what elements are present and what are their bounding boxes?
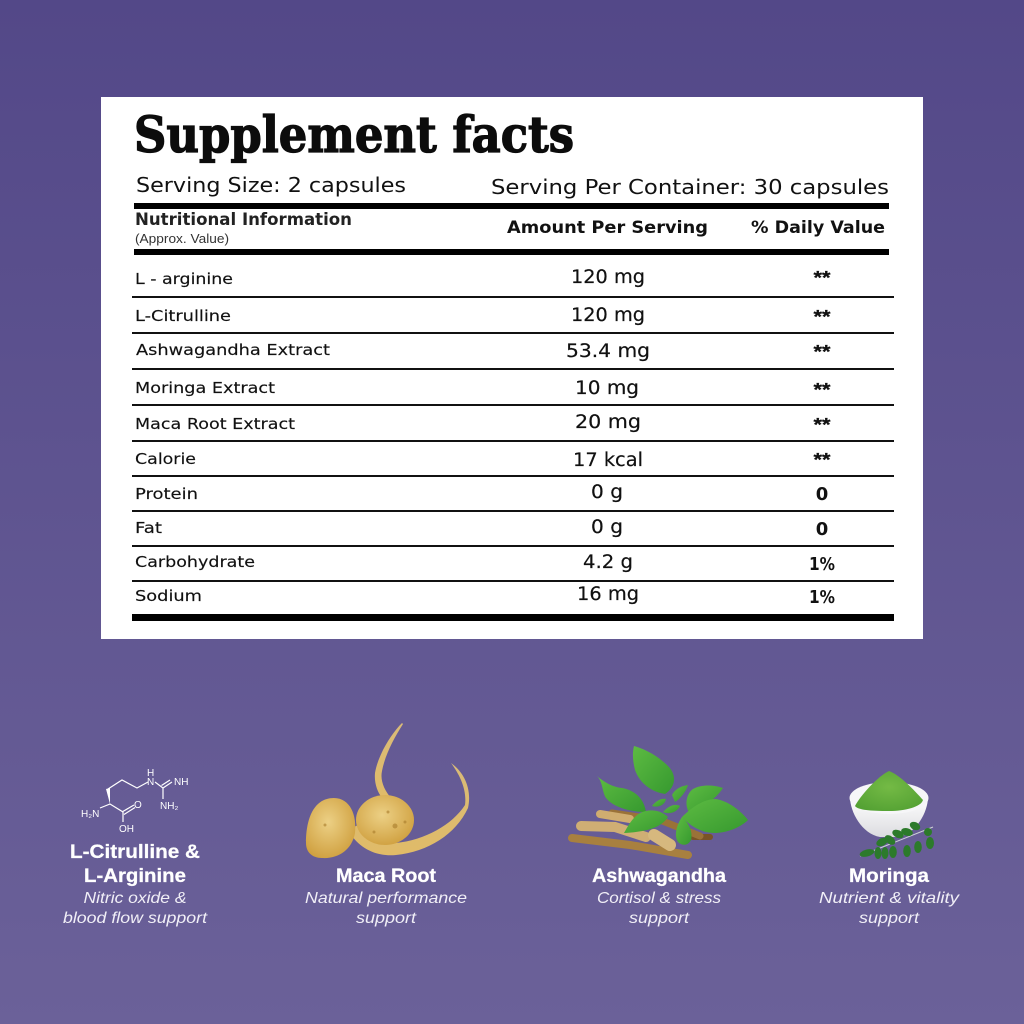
row: Sodium: Sodium: [135, 587, 202, 605]
icon: amino acid molecule: NH₂: [160, 801, 178, 812]
row: Protein: [135, 482, 828, 505]
serving size: Serving Size: 2 capsules: [136, 173, 406, 197]
row: Calorie: **: [814, 450, 830, 470]
row: L-Citrulline: [135, 305, 830, 327]
ingredient: Ashwagandha: support: [629, 910, 690, 927]
icon: amino acid molecule: OH: [119, 824, 134, 835]
description: Nutrient & vitality: [819, 890, 960, 907]
row: Fat: [135, 517, 828, 540]
ingredient: Ashwagandha: [572, 746, 748, 927]
row: Carbohydrate: Carbohydrate: [135, 553, 255, 571]
row: Sodium: 16 mg: [577, 584, 639, 605]
description: Nitric oxide &: [84, 890, 186, 907]
icon: moringa powder bowl and leaves: [850, 771, 934, 859]
column header: amount per serving: Amount Per Serving: [507, 218, 708, 238]
column header: nutritional information: (Approx. Value): [135, 232, 229, 246]
ingredient: L-Citrulline and L-Arginine: blood flow support: [63, 910, 208, 927]
row: Sodium: 1%: [809, 587, 835, 608]
ingredient: Moringa: support: [859, 910, 920, 927]
row: Ashwagandha Extract: 53.4 mg: [566, 341, 650, 362]
row: Maca Root Extract: Maca Root Extract: [135, 415, 295, 433]
row: Moringa Extract: [135, 378, 830, 400]
icon: ashwagandha plant and roots: [572, 746, 748, 855]
row: Moringa Extract: 10 mg: [575, 378, 639, 399]
row: L-arginine: 120 mg: [571, 267, 645, 288]
icon: maca root: [306, 723, 469, 858]
ingredient: Maca Root: [305, 723, 469, 927]
row: Protein: 0: [816, 484, 828, 505]
row: Maca Root Extract: 20 mg: [575, 412, 641, 433]
row: Fat: 0: [816, 519, 828, 540]
icon: amino acid molecule: N: [147, 777, 154, 788]
row: Carbohydrate: 4.2 g: [583, 552, 633, 573]
row: Sodium: [135, 584, 835, 608]
row: Moringa Extract: **: [814, 380, 830, 400]
column header: nutritional information: Nutritional Information: [135, 210, 352, 230]
icon: amino acid molecule: O: [134, 800, 142, 811]
title: Supplement facts: [134, 105, 574, 164]
icon: amino acid molecule: [81, 768, 188, 835]
row: L-arginine: [135, 267, 830, 288]
row rules: [132, 296, 894, 621]
row: Calorie: Calorie: [135, 450, 196, 468]
heading: L-Citrulline &: [70, 842, 200, 863]
row: L-arginine: L - arginine: [135, 270, 233, 288]
header rule top: [134, 203, 889, 209]
row: Protein: 0 g: [591, 482, 623, 503]
icon: amino acid molecule: H₂N: [81, 809, 99, 820]
ingredient: L-Citrulline and L-Arginine: [63, 768, 208, 927]
row: Protein: Protein: [135, 485, 198, 503]
description: Natural performance: [305, 890, 467, 907]
ingredient: Maca Root: support: [356, 910, 417, 927]
heading: Ashwagandha: [592, 866, 726, 887]
row: Moringa Extract: Moringa Extract: [135, 379, 275, 397]
row: Maca Root Extract: [135, 412, 830, 435]
ingredient: L-Citrulline and L-Arginine: L-Arginine: [84, 866, 186, 887]
column header: daily value: % Daily Value: [751, 218, 885, 238]
row: Carbohydrate: [135, 552, 835, 575]
row: Ashwagandha Extract: **: [814, 342, 830, 362]
row: L-Citrulline: **: [814, 307, 830, 327]
column header: nutritional information: [135, 210, 352, 246]
row: Carbohydrate: 1%: [809, 554, 835, 575]
heading: Maca Root: [336, 866, 437, 887]
row: L-Citrulline: L-Citrulline: [135, 307, 231, 325]
icon: amino acid molecule: H: [147, 768, 154, 779]
row: Ashwagandha Extract: Ashwagandha Extract: [136, 341, 330, 359]
header rule bottom: [134, 249, 889, 255]
heading: Moringa: [849, 866, 929, 887]
row: Calorie: [135, 450, 830, 471]
panel: supplement facts table: [101, 97, 923, 639]
ingredient: Moringa: [819, 771, 960, 927]
servings per container: Serving Per Container: 30 capsules: [491, 175, 889, 199]
icon: amino acid molecule: NH: [174, 777, 188, 788]
row: L-Citrulline: 120 mg: [571, 305, 645, 326]
row: Fat: 0 g: [591, 517, 623, 538]
row: Calorie: 17 kcal: [573, 450, 643, 471]
row: Maca Root Extract: **: [814, 415, 830, 435]
row: Ashwagandha Extract: [136, 341, 830, 362]
description: Cortisol & stress: [597, 890, 721, 907]
row: L-arginine: **: [814, 268, 830, 288]
row: Fat: Fat: [135, 519, 162, 537]
